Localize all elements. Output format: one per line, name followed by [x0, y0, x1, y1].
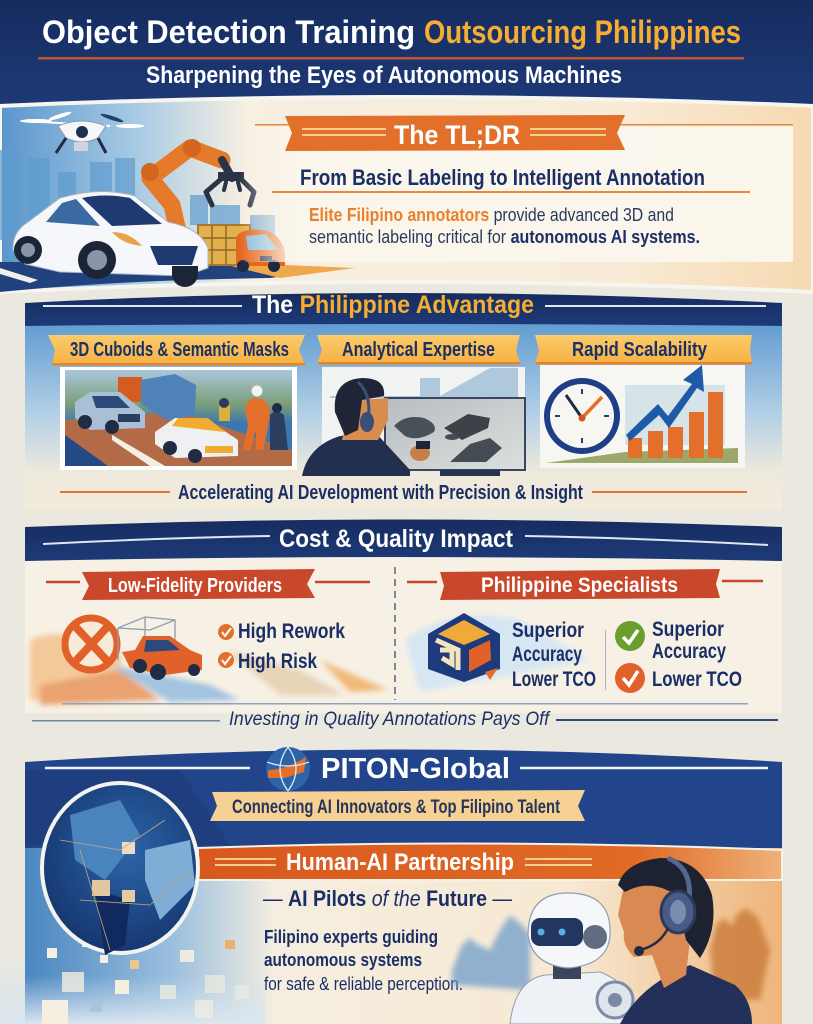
- card: 3D cuboids: [60, 367, 297, 470]
- banner: Analytical Expertise: [317, 335, 520, 364]
- orange band: [198, 843, 782, 880]
- icon: truck with bounding box: [118, 617, 202, 680]
- road: [0, 262, 345, 292]
- text block: summary line 2: semantic labeling critical for autonomous AI systems.: [309, 227, 700, 247]
- icon: drone: [20, 110, 144, 153]
- text block: partnership: Filipino experts guiding: [264, 927, 438, 947]
- header band: [0, 0, 813, 112]
- divider: [394, 567, 396, 700]
- icon: clock: [544, 378, 620, 454]
- bar chart: [628, 392, 723, 458]
- section heading bar: The Philippine Advantage: [252, 291, 534, 319]
- ribbon tagline: [210, 790, 585, 821]
- banner: Rapid Scalability: [535, 335, 752, 364]
- icon: orange truck: [198, 225, 285, 272]
- arrow: growth: [626, 365, 704, 441]
- text block: superior accuracy lower TCO: Lower TCO: [512, 668, 596, 691]
- panel: TL;DR hero: [0, 97, 813, 292]
- list: low-fidelity outcomes: [218, 620, 345, 673]
- text block: superior accuracy lower TCO: Superior: [512, 619, 584, 642]
- icon: robot arm: [141, 139, 254, 240]
- watercolor wash right: [405, 616, 590, 692]
- heading lines: [45, 767, 768, 769]
- list: low-fidelity outcomes: High Rework: [238, 620, 345, 643]
- list: specialist outcomes: [615, 618, 742, 693]
- title: Object Detection Training: [42, 14, 415, 50]
- brand name: PITON-Global: [321, 753, 510, 785]
- list: low-fidelity outcomes: High Risk: [238, 650, 317, 673]
- panel: TL;DR card: [240, 115, 793, 262]
- banner: Analytical Expertise: Analytical Expertise: [342, 339, 495, 361]
- text block: summary: Elite Filipino annotators provide advanced 3D and: [309, 205, 674, 225]
- city skyline: [0, 150, 275, 240]
- illustration: robot: [510, 893, 635, 1024]
- section heading bar: [25, 291, 782, 326]
- subtitle: Sharpening the Eyes of Autonomous Machines: [146, 62, 622, 89]
- text block: partnership: for safe & reliable perception.: [264, 974, 463, 994]
- banner: The TL;DR: [285, 115, 625, 151]
- ribbon tagline: Connecting AI Innovators & Top Filipino Talent: [232, 797, 561, 818]
- panel: PITON-Global: [25, 747, 782, 850]
- banner: Philippine Specialists: [407, 569, 763, 600]
- banner: Rapid Scalability: Rapid Scalability: [572, 339, 708, 361]
- banner: 3D Cuboids & Semantic Masks: 3D Cuboids & Semantic Masks: [70, 339, 289, 361]
- icon: hexagon cube: [428, 613, 500, 682]
- heading: AI Pilots of the Future: — AI Pilots of the Future —: [263, 886, 512, 911]
- list: specialist outcomes: Accuracy: [652, 640, 726, 663]
- logo: PITON-Global: [266, 747, 310, 791]
- panel: Human-AI Partnership: [0, 783, 782, 1024]
- icon: prohibited X: [65, 618, 117, 670]
- orange band: Human-AI Partnership: [286, 849, 514, 876]
- banner: Low-Fidelity Providers: Low-Fidelity Providers: [108, 575, 282, 597]
- list: specialist outcomes: Superior: [652, 618, 724, 641]
- banner: Philippine Specialists: Philippine Specialists: [481, 574, 678, 597]
- text block: partnership: autonomous systems: [264, 950, 422, 970]
- heading: From Basic Labeling to Intelligent Annotation: [300, 165, 705, 190]
- silhouettes: [452, 908, 770, 1000]
- watercolor wash left: [30, 634, 388, 705]
- pixel mosaic: [42, 938, 249, 1024]
- panel: The Philippine Advantage: [25, 291, 782, 510]
- caption: Investing in Quality Annotations Pays Off: [229, 709, 551, 730]
- banner: 3D Cuboids & Semantic Masks: [48, 335, 305, 366]
- icon: white car: [13, 191, 208, 287]
- list: specialist outcomes: Lower TCO: [652, 668, 742, 691]
- banner: Low-Fidelity Providers: [46, 569, 370, 600]
- globe: [42, 783, 198, 955]
- section heading bar: [25, 520, 782, 561]
- text block: partnership: [264, 927, 463, 994]
- text block: superior accuracy lower TCO: [512, 619, 596, 691]
- section heading bar: Cost & Quality Impact: [279, 525, 514, 553]
- caption: Accelerating AI Development with Precision & Insight: [178, 482, 583, 504]
- card: rapid scalability: [540, 365, 745, 468]
- illustration: human operator: [618, 858, 752, 1024]
- panel: Cost & Quality Impact: [25, 520, 782, 730]
- text block: superior accuracy lower TCO: Accuracy: [512, 643, 582, 666]
- title highlight: Outsourcing Philippines: [424, 14, 741, 50]
- banner: The TL;DR: The TL;DR: [394, 120, 520, 150]
- card: analytical expertise: [302, 367, 525, 476]
